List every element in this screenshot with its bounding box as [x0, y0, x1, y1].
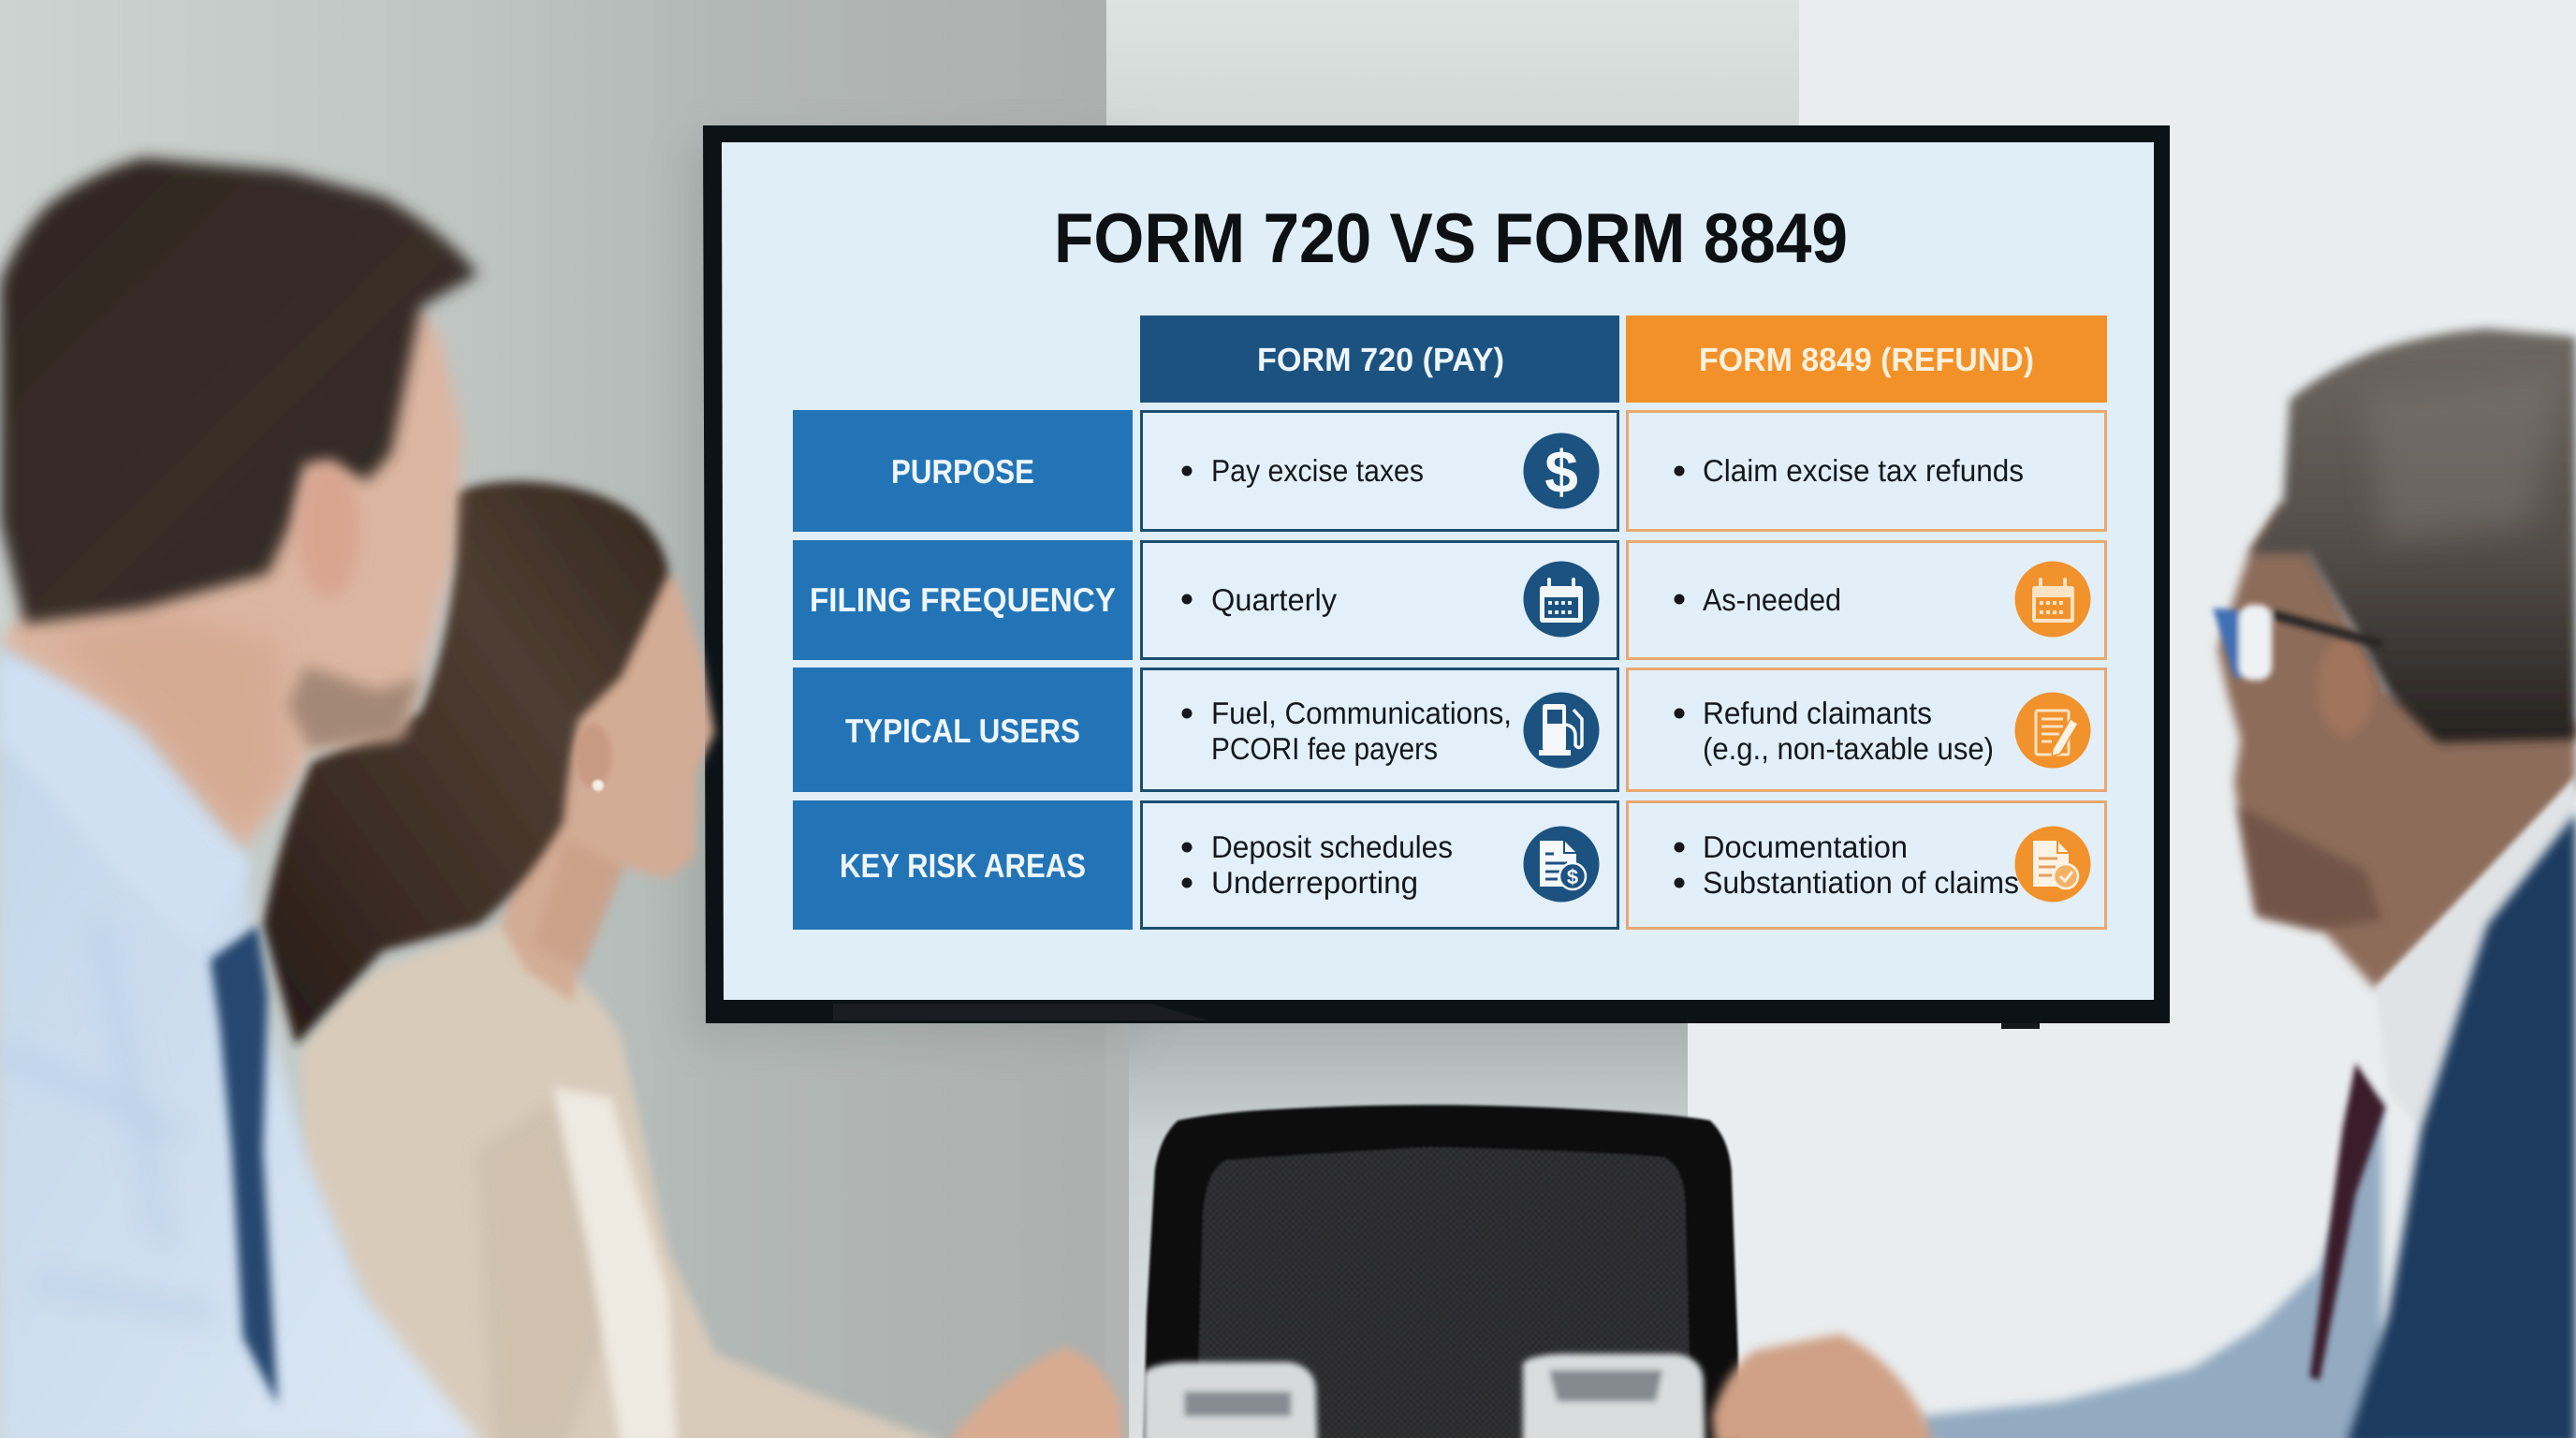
row label: Typical Users [793, 668, 1133, 792]
icon: calendar orange [2014, 562, 2091, 637]
right man collar [2376, 775, 2576, 1129]
man shirt [0, 642, 485, 1438]
cell: Form 720 purpose: Pay excise taxes [1211, 453, 1424, 488]
column header: Form 720: FORM 720 (PAY) [1257, 342, 1504, 378]
cell: Form 8849 risks: Substantiation of claims [1703, 865, 2019, 900]
screen panel [722, 142, 2154, 1000]
row label: Filing Frequency [793, 540, 1133, 660]
row label: Purpose [793, 410, 1133, 532]
cell: Form 720 purpose [1142, 412, 1617, 530]
icon: calendar [1524, 562, 1599, 637]
woman blouse [553, 1088, 677, 1438]
man ear [298, 460, 359, 598]
icon: fuel pump [1524, 693, 1599, 768]
office chair [1143, 1105, 1741, 1438]
right man face and neck [2217, 501, 2576, 990]
column header: Form 8849 [1626, 315, 2107, 403]
woman earring [593, 780, 604, 791]
man seated right [1712, 329, 2576, 1438]
column header: Form 8849: FORM 8849 (REFUND) [1699, 342, 2034, 378]
man tie [211, 925, 278, 1405]
cell: Form 8849 purpose [1627, 412, 2106, 530]
icon: dollar: $ [1544, 438, 1578, 506]
right man hair highlights [2365, 370, 2563, 542]
man hair [0, 157, 478, 624]
man beard [287, 666, 420, 749]
right man hands [1712, 1334, 1935, 1438]
cell: Form 720 risks: Deposit schedules [1211, 829, 1453, 864]
man seated left [0, 157, 485, 1438]
woman face and neck [501, 559, 714, 1003]
woman neck shading [534, 838, 624, 969]
icon: document with pen [2014, 693, 2091, 768]
cell: Form 8849 risks [1627, 801, 2106, 929]
cell: Form 8849 frequency: As-needed [1703, 582, 1841, 617]
right man glasses [2213, 605, 2382, 681]
cell: Form 8849 purpose: Claim excise tax refunds [1703, 453, 2024, 488]
cell: Form 720 risks [1142, 801, 1617, 929]
cell: Form 8849 users: (e.g., non-taxable use) [1703, 731, 1994, 766]
right man hair [2249, 329, 2576, 742]
column header: Form 720 [1140, 315, 1619, 403]
row label: Filing Frequency: FILING FREQUENCY [810, 580, 1116, 619]
cell: Form 720 users [1142, 668, 1617, 790]
cell: Form 720 frequency: Quarterly [1211, 582, 1337, 617]
drinking glasses [1143, 1354, 1705, 1438]
blazer shading [476, 1101, 611, 1438]
man neck and face [0, 307, 463, 848]
cell: Form 8849 risks: Documentation [1703, 829, 1908, 864]
cell: Form 720 frequency [1142, 541, 1617, 659]
cell: Form 8849 users [1627, 668, 2106, 790]
man neck shading [50, 611, 287, 838]
right man ear [2318, 638, 2374, 736]
woman ear [575, 723, 611, 788]
right man stubble [2237, 805, 2382, 930]
right man shirt sleeve [1914, 1093, 2382, 1438]
row label: Purpose: PURPOSE [891, 452, 1034, 491]
right man suit [2346, 814, 2576, 1438]
shirt folds [0, 920, 213, 1314]
row label: Key Risk Areas: KEY RISK AREAS [840, 846, 1086, 885]
icon: document with dollar [1524, 826, 1599, 902]
monitor power button [2001, 1023, 2040, 1029]
man collar [0, 657, 248, 951]
cell: Form 8849 users: Refund claimants [1703, 696, 1932, 730]
monitor frame [703, 125, 2170, 1023]
cell: Form 720 users: Fuel, Communications, [1211, 696, 1512, 730]
chair mesh [1196, 1147, 1692, 1438]
icon: document with dollar: $ [1567, 865, 1578, 888]
right man tie [2310, 1063, 2385, 1380]
icon: dollar [1524, 433, 1599, 509]
slide title: FORM 720 VS FORM 8849 [1054, 198, 1848, 277]
cell: Form 720 users: PCORI fee payers [1211, 731, 1438, 766]
woman seated left [263, 481, 953, 1438]
woman hair [263, 481, 668, 1045]
row label: Typical Users: TYPICAL USERS [845, 712, 1080, 750]
icon: document with check [2014, 826, 2091, 902]
cell: Form 720 risks: Underreporting [1211, 865, 1418, 900]
row label: Key Risk Areas [793, 800, 1133, 930]
monitor [688, 125, 2170, 1039]
monitor bottom reflection [833, 1004, 1208, 1020]
woman blazer [300, 925, 953, 1438]
cell: Form 8849 frequency [1627, 541, 2106, 659]
left hands [944, 1347, 1123, 1438]
monitor shadow [688, 140, 1137, 1039]
